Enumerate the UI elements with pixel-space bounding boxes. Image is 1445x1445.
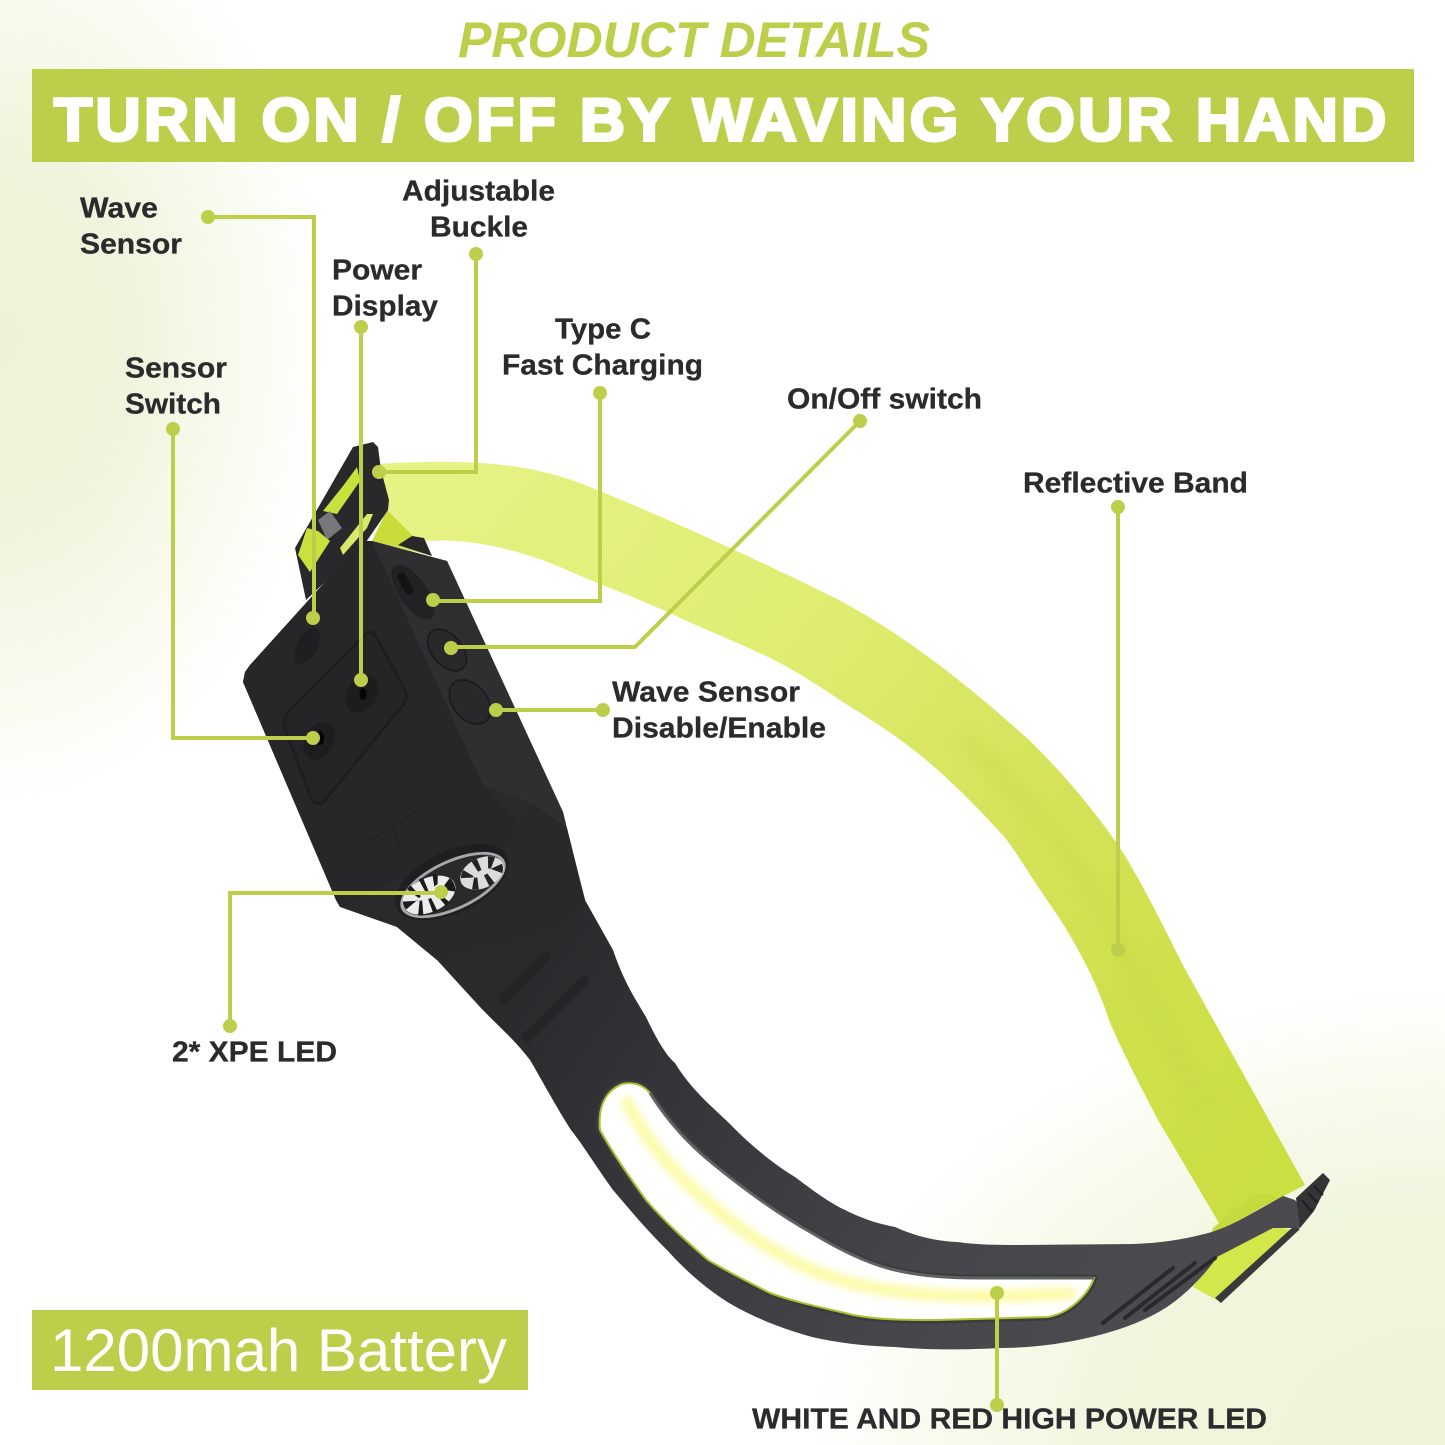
band right loop — [1193, 1194, 1300, 1303]
callout: on off switch — [444, 384, 982, 655]
wave sensor recess — [289, 624, 325, 668]
callout: sensor switch — [125, 352, 320, 745]
title banner — [32, 69, 1414, 162]
reflective band — [377, 462, 1305, 1228]
power display hole — [339, 669, 385, 719]
callout: type c fast charging: Fast Charging — [502, 350, 703, 382]
right buckle — [1296, 1173, 1330, 1228]
callout: wave sensor: Wave — [80, 192, 158, 224]
callout: adjustable buckle: Adjustable — [402, 176, 555, 208]
headlamp product — [243, 442, 1330, 1349]
callout: white and red high power led — [752, 1286, 1267, 1436]
callout: white and red high power led: WHITE AND RED HIGH POWER LED — [752, 1404, 1267, 1436]
callout: sensor switch: Sensor — [125, 352, 227, 384]
callout: on off switch: On/Off switch — [787, 384, 982, 416]
callout: power display: Power — [332, 254, 422, 286]
callout: reflective band — [1023, 468, 1248, 957]
wave disable button — [441, 672, 499, 732]
display panel — [284, 632, 407, 804]
callout: sensor switch: Switch — [125, 388, 221, 420]
callout: xpe led — [172, 885, 448, 1068]
callout: xpe led: 2* XPE LED — [172, 1036, 337, 1068]
callout: wave sensor: Sensor — [80, 228, 182, 260]
callout: adjustable buckle: Buckle — [430, 212, 528, 244]
subtitle: product details: PRODUCT DETAILS — [458, 12, 930, 68]
on off button — [420, 622, 474, 678]
side face — [372, 541, 585, 905]
lamp tab shadow — [397, 803, 585, 960]
callout: type c fast charging — [426, 314, 703, 607]
strap grooves — [504, 957, 1215, 1323]
band shading — [960, 735, 1212, 1120]
callout: type c fast charging: Type C — [555, 314, 651, 346]
callout: wave sensor disable enable: Disable/Enable — [612, 712, 826, 744]
callout: power display — [332, 254, 438, 687]
front face — [243, 541, 525, 907]
callout: wave sensor disable enable — [489, 676, 826, 744]
callout: reflective band: Reflective Band — [1023, 468, 1248, 500]
sensor switch hole — [297, 717, 341, 765]
title banner: TURN ON / OFF BY WAVING YOUR HAND — [54, 87, 1386, 153]
callout: power display: Display — [332, 290, 438, 322]
led lens — [384, 828, 520, 936]
top buckle — [295, 442, 433, 600]
battery badge: 1200mah Battery — [50, 1317, 507, 1384]
type c port — [383, 558, 443, 626]
led window cob — [600, 1083, 1094, 1320]
headlamp body and strap — [243, 541, 1300, 1349]
callout: wave sensor disable enable: Wave Sensor — [612, 676, 800, 708]
callout: wave sensor — [80, 192, 320, 625]
callout: adjustable buckle — [372, 176, 555, 479]
lower body step lines — [352, 792, 443, 850]
